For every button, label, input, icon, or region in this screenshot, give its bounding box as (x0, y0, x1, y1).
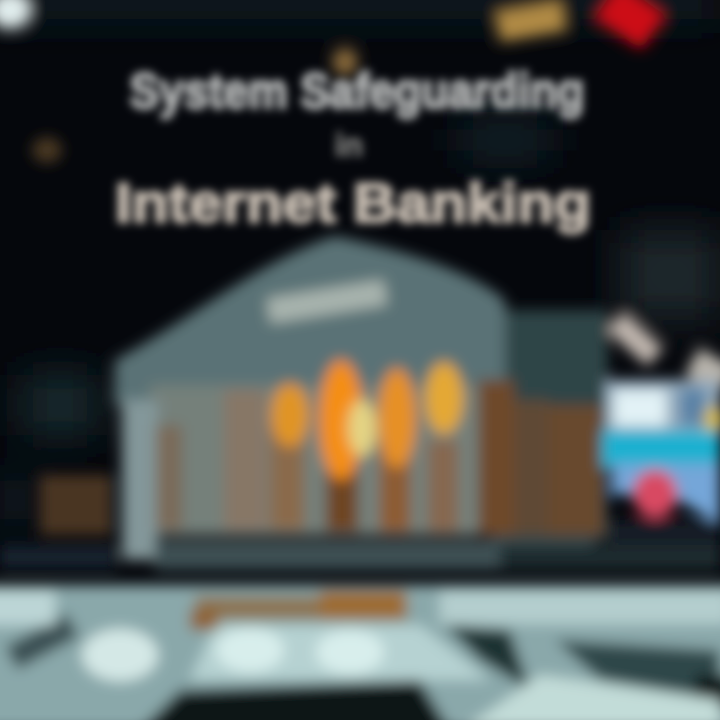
foreground: bronze plaque (190, 590, 407, 630)
corner accents (0, 0, 665, 163)
foreground: pale icy platform (0, 545, 720, 720)
title (115, 63, 591, 234)
building: roof pediment (115, 236, 505, 405)
title: in (335, 127, 363, 163)
building: glowing windows (271, 360, 463, 480)
title: Internet Banking (115, 171, 591, 234)
title: System Safeguarding (130, 63, 584, 119)
building: wall backing columns (150, 385, 480, 535)
right side: colourful laptop card (602, 312, 720, 550)
left side: small brown building (40, 475, 112, 535)
bank building (115, 236, 608, 570)
background: dark glow patches (0, 0, 720, 520)
building: base steps (155, 540, 595, 570)
building: left column (122, 400, 158, 560)
building: warm columns (156, 380, 603, 535)
building: sign on roof (267, 280, 387, 323)
building: right wing (490, 310, 608, 540)
